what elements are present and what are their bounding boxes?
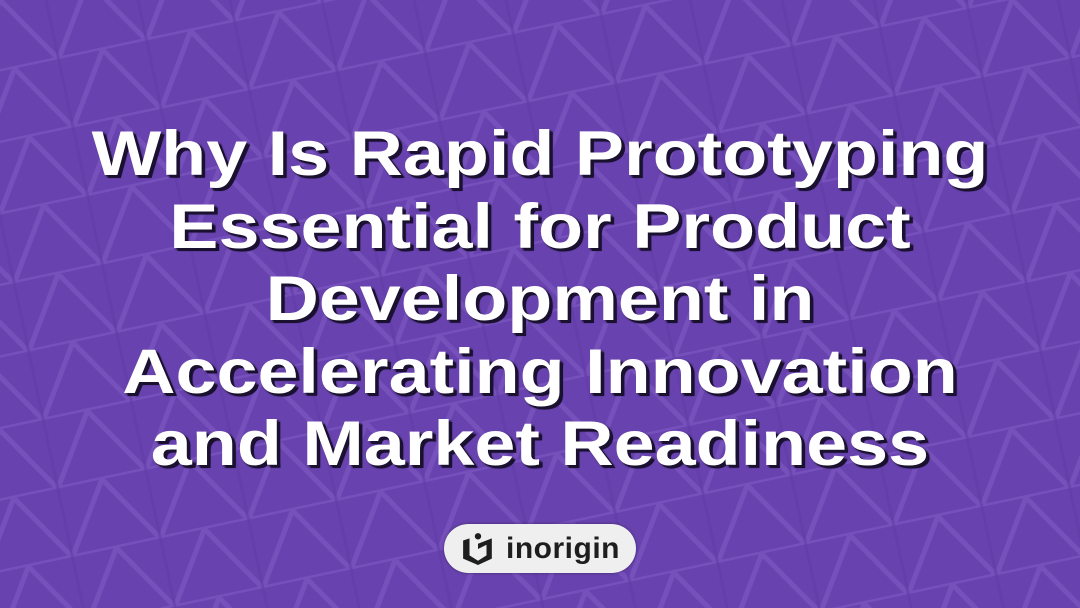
title: Essential for Product	[169, 192, 911, 262]
title: Accelerating Innovation	[122, 336, 958, 406]
title: Why Is Rapid Prototyping	[92, 119, 988, 189]
title: and Market Readiness	[151, 409, 929, 479]
title	[92, 119, 988, 479]
icon: inorigin cube	[463, 533, 492, 565]
logo: inorigin	[444, 524, 636, 573]
title: Development in	[266, 264, 814, 334]
logo: inorigin: inorigin	[506, 532, 620, 565]
